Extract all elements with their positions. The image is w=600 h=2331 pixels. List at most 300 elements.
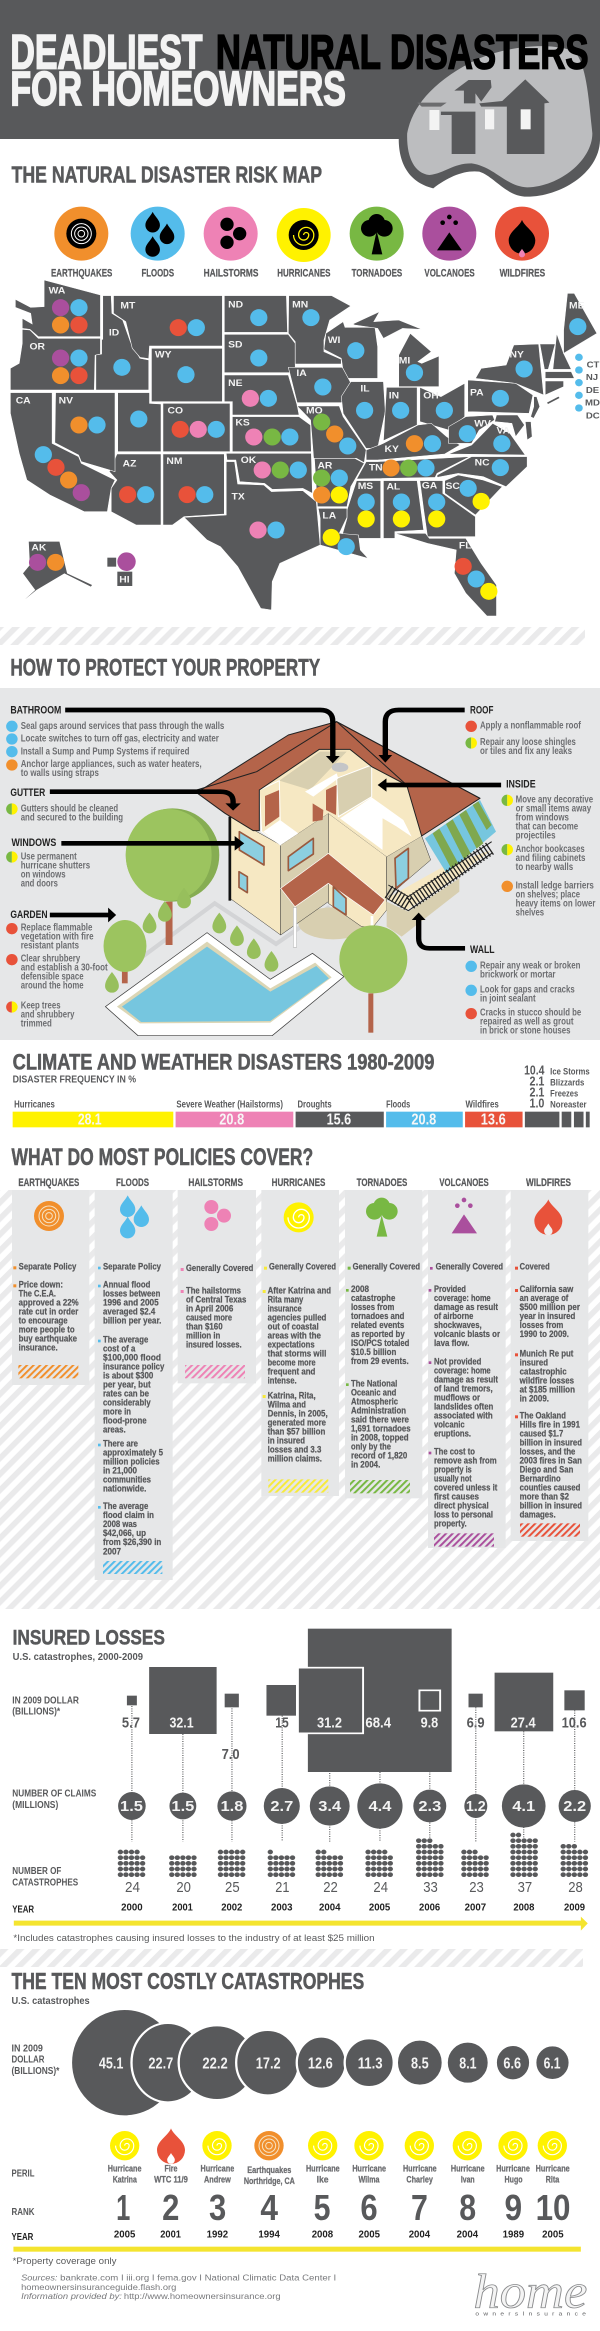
values: dollar losses: 31.2 (317, 1715, 342, 1731)
column: wildfires: WILDFIRES (526, 1177, 571, 1189)
column: wildfires: Covered (520, 1262, 550, 1272)
column: wildfires: Hills fire in 1991 (520, 1419, 580, 1429)
column: hurricanes: intense. (268, 1375, 297, 1385)
column: floods: 2007 (103, 1546, 121, 1556)
column: floods: more in (103, 1407, 131, 1417)
sources (21, 2273, 336, 2301)
column: hurricanes: million claims. (268, 1453, 322, 1463)
values: cost: 22.7 (148, 2054, 173, 2072)
peril names: Rita (546, 2175, 560, 2185)
column: volcanoes: volcanic blasts or (434, 1329, 500, 1339)
callout: garden: trimmed (21, 1019, 52, 1029)
legend labels: TORNADOES (352, 266, 402, 279)
values: dollar losses: 68.4 (365, 1715, 391, 1731)
column: tornadoes: catastrophe (351, 1293, 395, 1303)
bars: 20.8 (411, 1111, 436, 1128)
column: hurricanes: expectations (268, 1339, 315, 1349)
column: wildfires: Munich Re put (520, 1348, 573, 1358)
small state labels (585, 360, 600, 420)
bars: 20.8 (219, 1111, 244, 1128)
years: 2001 (172, 1902, 193, 1913)
state labels: SD (228, 340, 242, 350)
peril names: Hurricane (201, 2164, 235, 2174)
column: floods (95, 1177, 173, 1580)
column: hurricanes: Rita many (268, 1294, 303, 1304)
callout: gutter: GUTTER (10, 786, 45, 799)
state labels: KS (235, 418, 250, 428)
values: catastrophes (125, 1880, 583, 1896)
years (121, 1902, 585, 1913)
column: hurricanes: in insured (268, 1435, 305, 1445)
footnote: *Includes catastrophes causing insured losses to the industry of at least $25 million (13, 1934, 375, 1944)
arrow: roof (378, 710, 465, 763)
column: floods: Annual flood (103, 1280, 150, 1290)
column: floods: averaged $2.4 (103, 1307, 155, 1317)
values: cost: 8.1 (459, 2054, 477, 2072)
rank numbers: 2 (162, 2188, 179, 2228)
arrow: bathroom (65, 710, 340, 763)
column: volcanoes: damage as result (434, 1374, 498, 1384)
logo: o w n e r s I n s u r a n c e (475, 2311, 586, 2318)
sources: Sources: (21, 2273, 58, 2283)
column: wildfires: $500 million per (520, 1302, 580, 1312)
bars: 13.6 (481, 1111, 506, 1128)
callout: bathroom: BATHROOM (10, 703, 61, 716)
small state labels: MD (585, 398, 600, 408)
callout: inside: from windows (516, 813, 569, 823)
row labels (12, 2043, 60, 2243)
house illustration (197, 722, 496, 947)
column: earthquakes: buy earthquake (19, 1334, 77, 1344)
column: volcanoes: loss to personal (434, 1510, 493, 1520)
callout: inside: projectiles (516, 831, 556, 841)
state labels: OK (241, 456, 256, 466)
column: floods: 1996 and 2005 (103, 1298, 159, 1308)
arrow: timeline (14, 1917, 588, 1931)
peril names: Hurricane (352, 2164, 387, 2174)
legend labels: EARTHQUAKES (51, 266, 112, 279)
bar labels (14, 1100, 499, 1110)
column: tornadoes: related events (351, 1320, 404, 1330)
values: cost: 45.1 (99, 2054, 123, 2072)
column: tornadoes: said there were (351, 1414, 409, 1424)
state labels: AR (317, 461, 332, 471)
column: earthquakes: Price down: (19, 1280, 63, 1290)
state labels: MI (399, 356, 411, 366)
column: tornadoes: as reported by (351, 1329, 405, 1339)
title: DEADLIEST (10, 26, 203, 79)
bar labels: Droughts (298, 1100, 332, 1110)
column: floods: losses between (103, 1289, 160, 1299)
legend labels: VOLCANOES (424, 266, 475, 279)
column: tornadoes: 1,691 tornadoes (351, 1423, 411, 1433)
state labels: WY (155, 350, 172, 360)
column: volcanoes: shockwaves, (434, 1320, 482, 1330)
rank numbers: 9 (505, 2188, 522, 2228)
bars (13, 1111, 590, 1128)
state labels: ME (569, 301, 585, 311)
callout: bathroom: Install a Sump and Pump Systems if required (21, 747, 189, 757)
values: catastrophes: 37 (518, 1880, 532, 1896)
state labels: MO (306, 406, 323, 416)
column: hailstorms: than $160 (186, 1321, 223, 1331)
column: earthquakes: approved a 22% (19, 1298, 79, 1308)
peril names: Charley (406, 2175, 433, 2185)
values: dollar losses: 32.1 (169, 1715, 194, 1731)
icon: floods (131, 207, 185, 261)
values: cost: 12.6 (308, 2054, 333, 2072)
values: dollar losses (122, 1715, 587, 1763)
column: hurricanes: agencies pulled (268, 1312, 326, 1322)
subheading: U.S. catastrophes, 2000-2009 (13, 1653, 143, 1663)
column: hurricanes: HURRICANES (272, 1177, 325, 1189)
row labels: NUMBER OF (12, 1866, 62, 1877)
column: hurricanes: out of coastal (268, 1321, 319, 1331)
state labels: TN (369, 463, 383, 473)
callout: windows: WINDOWS (12, 836, 56, 849)
column: hailstorms: million in (186, 1330, 220, 1340)
column: hurricanes: frequent and (268, 1366, 315, 1376)
column: earthquakes: EARTHQUAKES (18, 1177, 79, 1189)
column: floods: Separate Policy (103, 1262, 161, 1272)
column: floods: communities (103, 1475, 151, 1485)
years: 2004 (457, 2229, 478, 2240)
values: catastrophes: 24 (125, 1880, 140, 1896)
column: volcanoes: coverage: home (434, 1293, 491, 1303)
state labels: ID (109, 328, 119, 338)
striped background (0, 1190, 600, 1609)
arrow: inside (378, 778, 501, 792)
column: hailstorms: in April 2006 (186, 1303, 233, 1313)
callout: garden: around the home (21, 981, 84, 991)
column: tornadoes: in 2008, topped (351, 1432, 409, 1442)
icon: hurricane (354, 2131, 384, 2160)
state labels: LA (322, 511, 336, 521)
column: volcanoes: eruptions. (434, 1428, 471, 1438)
circles: claims (118, 1783, 591, 1829)
callout: garden: defensible space (21, 972, 84, 982)
squares: dollar losses (127, 1629, 585, 1772)
values: cost: 8.5 (411, 2054, 429, 2072)
column: wildfires: year in insured (520, 1311, 575, 1321)
states (10, 280, 597, 616)
header banner (0, 0, 600, 197)
values: cost: 6.1 (544, 2054, 561, 2072)
column: wildfires (511, 1177, 588, 1541)
callout: inside: to nearby walls (516, 863, 573, 873)
years: 2004 (319, 1902, 340, 1913)
column: volcanoes: landslides often (434, 1401, 493, 1411)
small state labels: DC (586, 411, 600, 420)
column: hurricanes: that storms will (268, 1348, 326, 1358)
column: volcanoes: Not provided (434, 1356, 481, 1366)
values: cost (99, 2054, 561, 2072)
peril names: Hurricane (536, 2164, 570, 2174)
circles: claims: 4.1 (512, 1799, 536, 1815)
awning (387, 850, 492, 910)
callout: garden: Replace flammable (21, 923, 93, 933)
column: earthquakes: to encourage (19, 1316, 68, 1326)
column: wildfires: caused $1.7 (520, 1428, 563, 1438)
circles: claims: 4.4 (368, 1799, 392, 1815)
callout: bathroom (6, 703, 224, 779)
column: wildfires: losses, and the (520, 1446, 575, 1456)
callout: inside: INSIDE (506, 777, 536, 790)
bar labels: Severe Weather (Hailstorms) (176, 1100, 283, 1110)
title: FOR HOMEOWNERS (10, 62, 346, 116)
minor disasters key: Freezes (550, 1089, 578, 1099)
column: floods: There are (103, 1439, 138, 1449)
state labels: MN (292, 300, 308, 310)
values: dollar losses: 9.8 (421, 1715, 438, 1731)
minor disasters key: 1.0 (529, 1097, 544, 1111)
column: floods: The average (103, 1335, 148, 1345)
legend icons (54, 207, 549, 262)
years: 2006 (419, 1902, 440, 1913)
column: floods: approximately 5 (103, 1448, 163, 1458)
bar labels: Wildfires (465, 1100, 499, 1110)
state labels: IN (389, 391, 399, 401)
bubbles: cost (71, 2009, 570, 2116)
peril names: WTC 11/9 (154, 2175, 188, 2185)
heading: ten most costly: THE TEN MOST COSTLY CATASTROPHES (12, 1970, 364, 1995)
peril names (108, 2164, 570, 2187)
legend labels: HAILSTORMS (204, 266, 258, 279)
column: tornadoes: Oceanic and (351, 1387, 396, 1397)
column: floods: considerably (103, 1398, 151, 1408)
callout: gutter: Gutters should be cleaned (21, 804, 118, 814)
title (10, 26, 589, 116)
callout: garden: Keep trees (21, 1001, 61, 1011)
column: wildfires: at $185 million (520, 1384, 575, 1394)
rank numbers: 10 (536, 2188, 570, 2228)
state labels: OR (30, 342, 45, 352)
values: catastrophes: 33 (423, 1880, 438, 1896)
row labels: (BILLIONS)* (12, 2066, 60, 2077)
column: floods: per year, but (103, 1380, 151, 1390)
house blob illustration (399, 46, 600, 197)
garden illustration (104, 808, 344, 1036)
state labels: WV (474, 419, 491, 429)
years: 2009 (564, 1902, 585, 1913)
row labels: NUMBER OF CLAIMS (12, 1788, 96, 1799)
circles: claims: 1.5 (171, 1799, 195, 1815)
column: hurricanes: generated more (268, 1417, 326, 1427)
column: hurricanes (261, 1177, 339, 1496)
callout: wall (465, 943, 581, 1036)
rank numbers: 3 (209, 2188, 226, 2228)
callout: inside (501, 777, 595, 918)
column: earthquakes: more people to (19, 1325, 75, 1335)
icon: fire (157, 2128, 185, 2164)
column: tornadoes: only by the (351, 1441, 391, 1451)
callout: wall: in joint sealant (480, 994, 536, 1004)
state labels: FL (459, 541, 472, 551)
state labels: WA (49, 286, 65, 296)
column: tornadoes: losses from (351, 1302, 394, 1312)
row labels: (MILLIONS) (12, 1800, 59, 1811)
column: volcanoes: mudflows or (434, 1392, 480, 1402)
divider stripes (0, 1949, 583, 1967)
column: volcanoes: remove ash from (434, 1456, 497, 1466)
column: hailstorms: HAILSTORMS (188, 1177, 243, 1189)
state labels: AL (386, 482, 400, 492)
minor disasters key: 2.1 (529, 1085, 544, 1100)
state labels: NY (510, 350, 524, 360)
column: tornadoes: Administration (351, 1405, 406, 1415)
icon: hailstorms (204, 207, 258, 261)
values: dollar losses: 6.9 (467, 1715, 485, 1731)
column: floods: flood claim in (103, 1510, 154, 1520)
column: hailstorms: The hailstorms (186, 1285, 241, 1295)
column: hailstorms: insured losses. (186, 1339, 242, 1349)
row labels: CATASTROPHES (12, 1877, 78, 1888)
peril names: Northridge, CA (244, 2177, 295, 2187)
circles: claims: 1.2 (466, 1799, 486, 1815)
state labels: OH (423, 391, 439, 401)
column: wildfires: Bernardino (520, 1473, 561, 1483)
minor disasters key: Noreaster (550, 1100, 587, 1110)
column: hurricanes: Wilma and (268, 1399, 306, 1409)
heading: risk map: THE NATURAL DISASTER RISK MAP (12, 162, 322, 188)
sources: homeownersinsuranceguide.flash.org (21, 2283, 176, 2292)
state labels: AZ (123, 459, 137, 469)
column: tornadoes: in 2004. (351, 1459, 380, 1469)
risk dots (29, 299, 586, 600)
callout: wall: WALL (470, 943, 495, 956)
column: floods: from $26,390 in (103, 1537, 161, 1547)
column: volcanoes: property. (434, 1519, 467, 1529)
years: 2005 (358, 2229, 380, 2240)
icon: hurricane (453, 2131, 482, 2160)
arrow: garden (50, 908, 116, 922)
column: floods: is about $300 (103, 1371, 153, 1381)
column: hurricanes: Generally Covered (269, 1262, 336, 1272)
arrow: gutter (50, 792, 241, 811)
sources: Information provided by: (21, 2292, 122, 2301)
state labels: WI (328, 336, 341, 346)
rank numbers: 7 (411, 2188, 428, 2228)
column: hurricanes: areas with the (268, 1330, 321, 1340)
state labels: NC (475, 458, 490, 468)
callout: garden: Clear shrubbery (21, 954, 80, 964)
column: floods: flood-prone (103, 1416, 147, 1426)
column: tornadoes: record of 1,820 (351, 1450, 407, 1460)
column: volcanoes: property is (434, 1465, 472, 1475)
row labels: YEAR (12, 2232, 34, 2243)
column: floods: million policies (103, 1457, 160, 1467)
legend labels: HURRICANES (277, 266, 330, 279)
legend labels: FLOODS (141, 266, 174, 279)
column: earthquakes (12, 1177, 89, 1385)
column: volcanoes: Generally Covered (436, 1262, 503, 1272)
values: catastrophes: 22 (323, 1880, 338, 1896)
callout: bathroom: Locate switches to turn off gas, electricity and water (21, 734, 219, 744)
column: tornadoes: TORNADOES (357, 1177, 407, 1189)
circles: claims: 2.2 (563, 1799, 586, 1815)
state labels (16, 286, 585, 585)
years: 2000 (121, 1902, 143, 1913)
small state labels: CT (587, 360, 600, 369)
values: dollar losses: 5.7 (122, 1715, 140, 1731)
circles: claims: 1.5 (120, 1799, 143, 1815)
minor disasters key: 10.4 (524, 1063, 544, 1078)
column: earthquakes: Separate Policy (19, 1262, 76, 1272)
column: tornadoes: 2008 (351, 1284, 369, 1294)
callout: bathroom: to walls using straps (21, 769, 99, 779)
callout: garden: resistant plants (21, 941, 79, 951)
values: catastrophes: 28 (568, 1880, 583, 1896)
column: hurricanes: insurance (268, 1303, 302, 1313)
column: floods: billion per year. (103, 1316, 161, 1326)
callout: inside: shelves (516, 908, 544, 918)
column: volcanoes (428, 1177, 506, 1548)
heading: climate: CLIMATE AND WEATHER DISASTERS 1980-2009 (13, 1050, 434, 1075)
windows (239, 832, 408, 915)
minor disasters key (524, 1063, 590, 1111)
small state labels: DE (586, 386, 599, 395)
state labels: NV (59, 396, 74, 406)
heading: policies: WHAT DO MOST POLICIES COVER? (12, 1145, 313, 1171)
column: floods: areas. (103, 1425, 126, 1435)
column: wildfires: Diego and San (520, 1464, 573, 1474)
column: tornadoes: $10.5 billion (351, 1347, 396, 1357)
column: hurricanes: Dennis, in 2005, (268, 1408, 328, 1418)
column: tornadoes (345, 1177, 422, 1498)
icon: hurricane (405, 2131, 434, 2160)
column: tornadoes: Generally Covered (353, 1262, 420, 1272)
years (114, 2229, 564, 2240)
rank numbers: 8 (459, 2188, 476, 2228)
callout: gutter: and secured to the building (21, 813, 123, 823)
dotted connectors (132, 1706, 575, 1842)
column: wildfires: more than $2 (520, 1491, 569, 1501)
small state labels: NJ (586, 373, 598, 382)
column: hurricanes: After Katrina and (268, 1285, 331, 1295)
years: 1992 (207, 2229, 228, 2240)
column: floods: $100,000 flood (103, 1353, 161, 1363)
ten most costly catastrophes section (12, 1970, 587, 2318)
state labels: NM (166, 457, 182, 467)
column: wildfires: losses from (520, 1320, 563, 1330)
column: tornadoes: from 29 events. (351, 1356, 409, 1366)
state labels: AK (31, 543, 46, 553)
bars: 15.6 (327, 1111, 351, 1128)
icon: wildfires (495, 207, 549, 261)
bars: 28.1 (78, 1111, 102, 1128)
column: tornadoes: tornadoes and (351, 1311, 404, 1321)
column: volcanoes: associated with (434, 1410, 493, 1420)
column: wildfires: in 2009. (520, 1393, 549, 1403)
column: earthquakes: rate cut in order (19, 1307, 79, 1317)
circles: claims: 3.4 (318, 1799, 342, 1815)
column: tornadoes: Atmospheric (351, 1396, 398, 1406)
state labels: SC (446, 482, 460, 492)
column: hurricanes: become more (268, 1357, 316, 1367)
callout: windows: Use permanent (21, 852, 77, 862)
legend labels (51, 266, 545, 279)
dots: number of catastrophes (120, 1835, 585, 1875)
column: floods: $42,066, up (103, 1528, 146, 1538)
values: catastrophes: 23 (469, 1880, 484, 1896)
icon: earthquake (254, 2131, 284, 2160)
column: hailstorms: caused more (186, 1312, 232, 1322)
row labels: IN 2009 DOLLAR (12, 1695, 79, 1706)
row labels: YEAR (12, 1904, 34, 1915)
row labels: (BILLIONS)* (12, 1706, 61, 1717)
footnote: *Property coverage only (13, 2257, 117, 2267)
column: floods: rates can be (103, 1389, 149, 1399)
